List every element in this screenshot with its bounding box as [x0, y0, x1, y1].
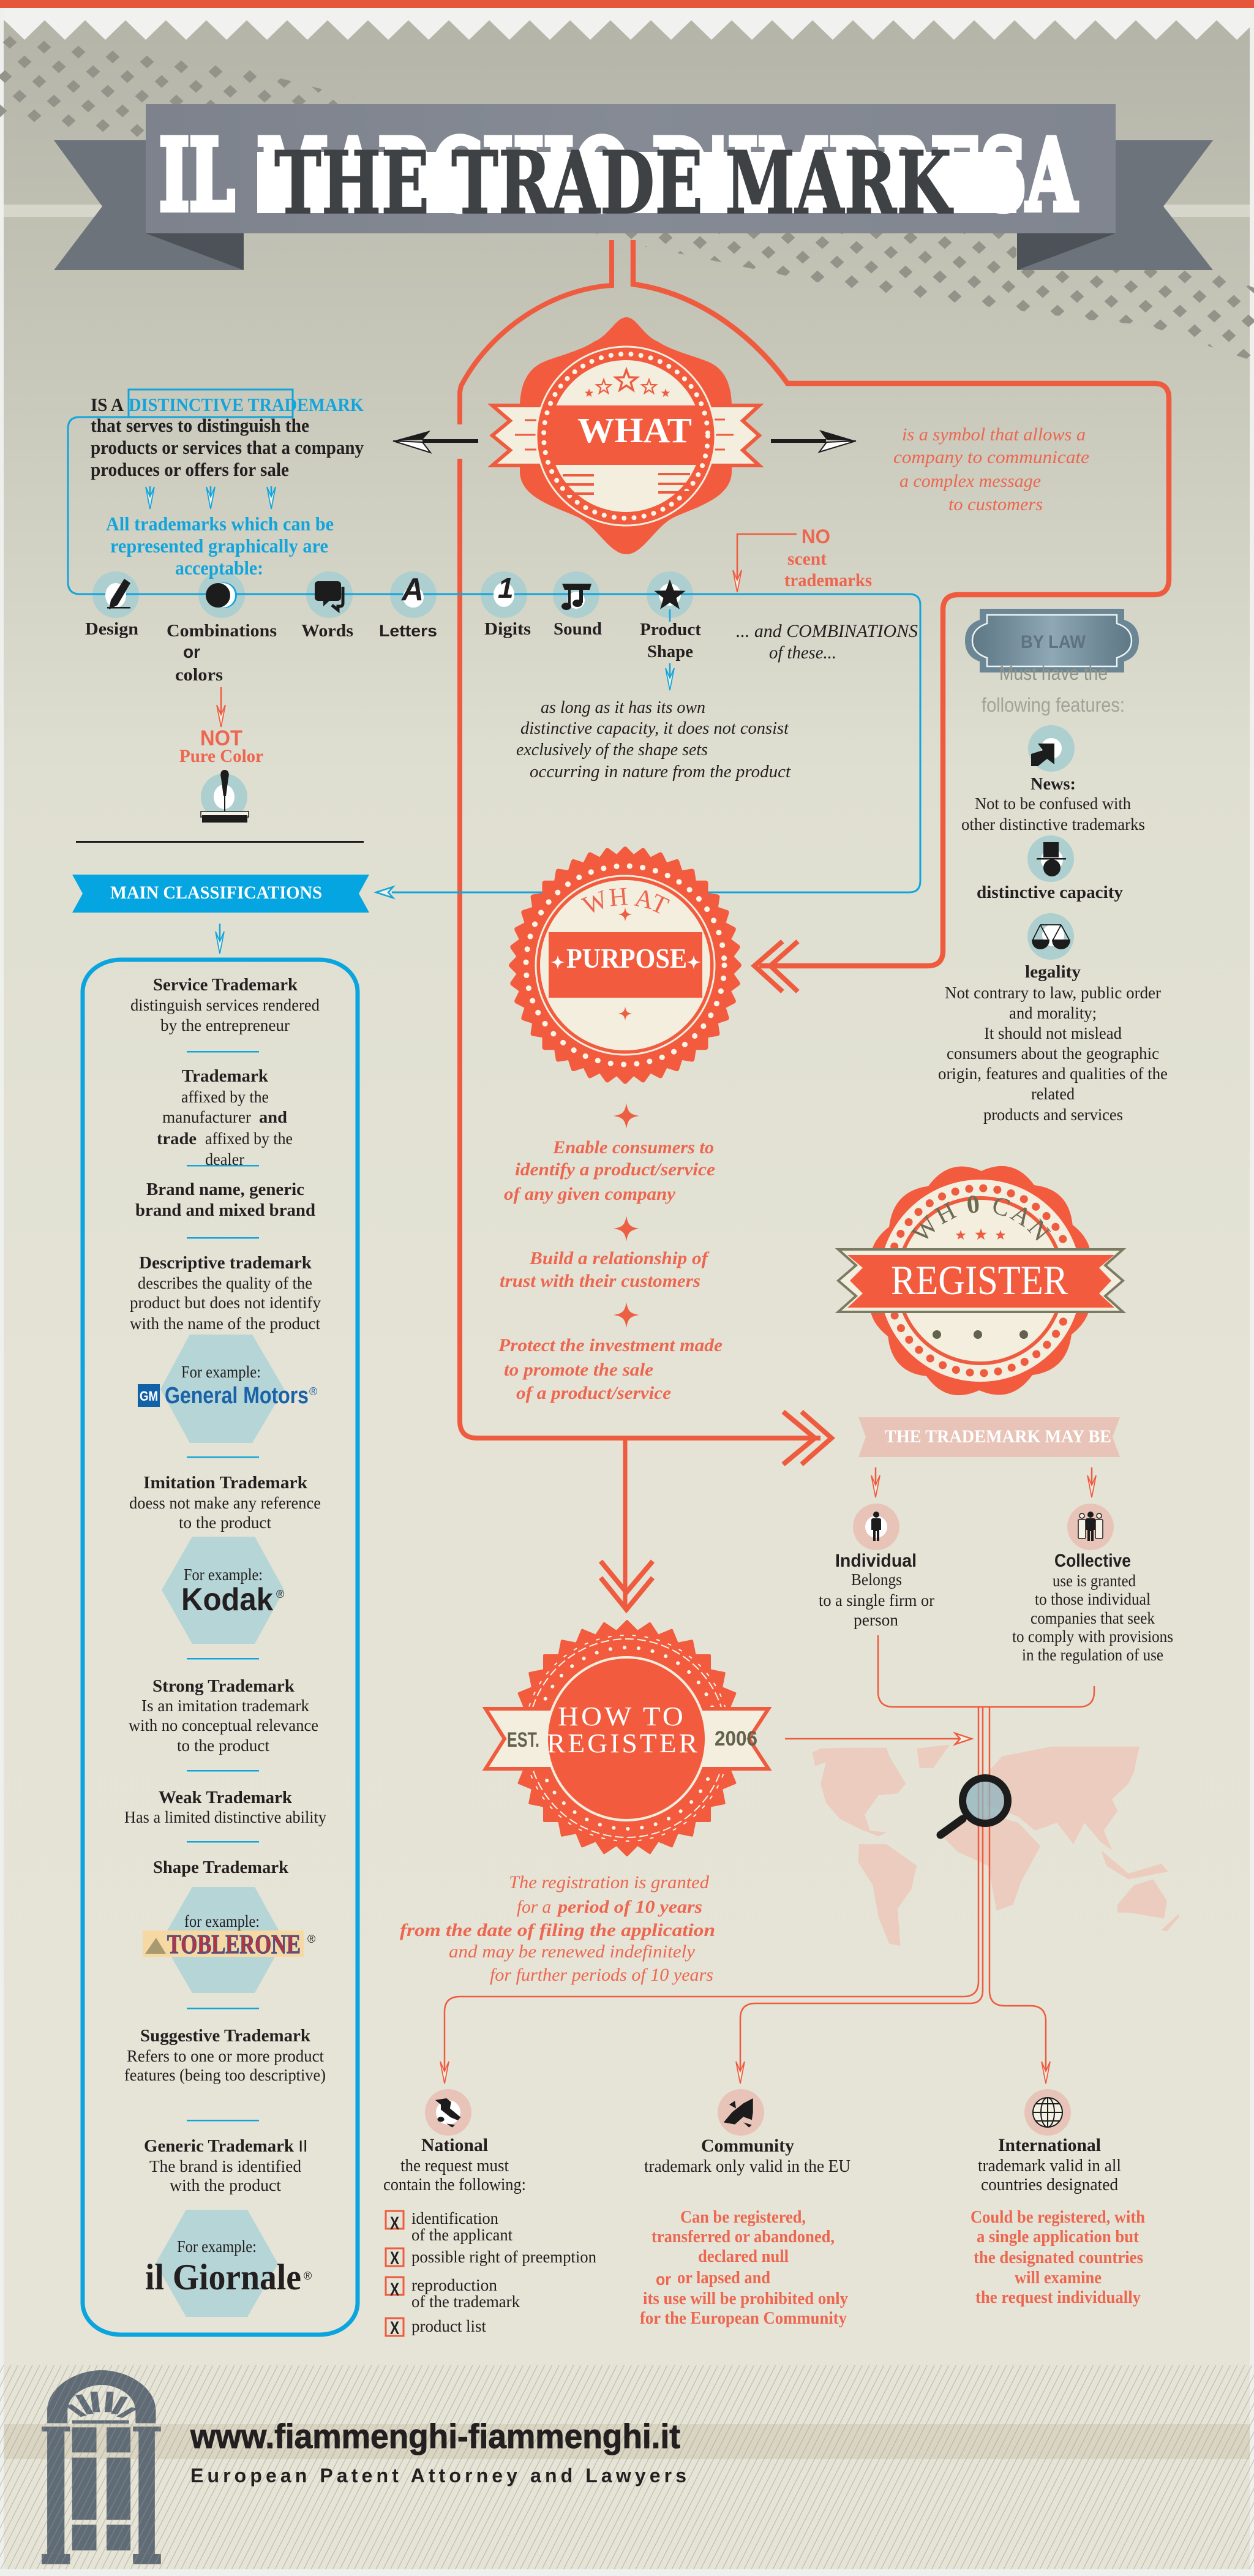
title: THE TRADE MARK: [274, 133, 953, 234]
not pure color: NOT: [200, 726, 242, 750]
community red text: Can be registered,: [680, 2208, 806, 2227]
arrow: chevrons to purpose: [754, 941, 798, 992]
registration text: period of 10 years: [556, 1897, 702, 1917]
graphically representable text: [106, 513, 334, 579]
trademark: and: [259, 1108, 287, 1126]
registration text: from the date of filing the application: [400, 1920, 715, 1940]
arrow: no scent: [733, 534, 797, 592]
purpose bullets: of a product/service: [516, 1383, 671, 1403]
icon: stamp: [201, 770, 249, 823]
symbol description: to customers: [948, 494, 1043, 514]
plaque: by law: BY LAW: [1021, 632, 1086, 652]
arrow: not pure color: [217, 687, 225, 727]
badge: how to register: EST.: [507, 1728, 539, 1752]
imitation trademark: Imitation Trademark: [143, 1473, 308, 1493]
arrow: chevrons to register: [783, 1412, 832, 1464]
descriptive trademark: [130, 1253, 321, 1381]
icon: collective: [1067, 1504, 1114, 1550]
individual text: to a single firm or: [819, 1591, 934, 1610]
badge: who can register: REGISTER: [891, 1257, 1068, 1303]
icon: magnifier: [940, 1778, 1008, 1835]
footer band: [4, 2424, 1250, 2459]
badge: what: WHAT: [577, 410, 692, 450]
icon: distinctive capacity: [1027, 835, 1074, 882]
purpose bullets: Enable consumers to: [552, 1137, 714, 1158]
suggestive trademark: features (being too descriptive): [124, 2066, 326, 2084]
registration text: The registration is granted: [509, 1872, 710, 1892]
descriptive trademark: product but does not identify: [130, 1294, 321, 1312]
top red band: [0, 0, 1254, 8]
background light stripe: [4, 205, 1250, 217]
community red text: its use will be prohibited only: [643, 2289, 848, 2308]
logo: general motors: ®: [309, 1385, 317, 1398]
badge: how to register: HOW TO: [558, 1701, 686, 1731]
community text: Community: [701, 2136, 794, 2156]
trademark: dealer: [205, 1150, 244, 1169]
purpose bullets: trust with their customers: [500, 1271, 700, 1291]
symbol description: company to communicate: [893, 447, 1089, 467]
purpose bullets: identify a product/service: [515, 1159, 715, 1180]
shape trademark: for example:: [184, 1912, 260, 1930]
purpose bullets: Protect the investment made: [498, 1335, 723, 1355]
news text: other distinctive trademarks: [961, 815, 1145, 834]
registration text: for a: [517, 1897, 551, 1917]
graphically representable text: acceptable:: [175, 557, 263, 579]
bracket: individual and collective join: [878, 1635, 1094, 1707]
badge: how to register: [486, 1621, 768, 1855]
national text: National: [421, 2135, 488, 2155]
trademark: manufacturer: [162, 1108, 251, 1126]
international red text: Could be registered, with: [971, 2208, 1145, 2227]
shape description: occurring in nature from the product: [530, 762, 791, 781]
checklist: X: [390, 2280, 399, 2300]
badge: who can register: WH 0 CAN: [910, 1196, 1051, 1241]
checklist: of the applicant: [411, 2226, 512, 2244]
registration text: for further periods of 10 years: [490, 1965, 713, 1985]
purpose bullets: [498, 1103, 723, 1403]
arrow: right black: [771, 430, 856, 452]
arrow: how to register to map: [785, 1733, 972, 1744]
icon: letters: A: [400, 572, 424, 608]
hexagon backgrounds: [156, 1335, 284, 2317]
plaque: by law: [965, 609, 1139, 672]
individual text: [819, 1551, 934, 1629]
icon labels: Sound: [554, 619, 602, 639]
generic trademark: For example:: [177, 2237, 257, 2256]
individual text: person: [854, 1611, 899, 1629]
legality text: It should not mislead: [984, 1024, 1122, 1042]
icon labels: or: [183, 642, 200, 662]
no scent trademarks: [784, 525, 872, 590]
trademark: Trademark: [182, 1066, 269, 1086]
weak trademark: Has a limited distinctive ability: [124, 1808, 326, 1826]
icon: digits: [494, 572, 514, 607]
purpose bullets: Build a relationship of: [529, 1248, 710, 1268]
shape description: distinctive capacity, it does not consist: [520, 718, 789, 738]
connector to national: [445, 1707, 978, 2070]
banner: the trademark may be: THE TRADEMARK MAY BE: [885, 1426, 1111, 1447]
orange flow line right: [633, 240, 1169, 966]
legality text: related: [1031, 1085, 1075, 1103]
trademark: [157, 1066, 293, 1169]
checklist: X: [390, 2318, 399, 2338]
trademark: affixed by the: [181, 1088, 269, 1106]
banner: the trademark may be: [858, 1417, 1120, 1457]
connector to international: [989, 1707, 1046, 2070]
collective text: to those individual: [1035, 1590, 1151, 1608]
generic trademark: with the product: [170, 2176, 282, 2194]
background diamonds top left: [0, 34, 380, 141]
shape trademark: [153, 1858, 289, 1930]
suggestive trademark: Refers to one or more product: [127, 2047, 324, 2065]
shape description: exclusively of the shape sets: [516, 740, 708, 759]
descriptive trademark: Descriptive trademark: [139, 1253, 312, 1273]
logo: toblerone: TOBLERONE: [167, 1929, 301, 1959]
strong trademark: Is an imitation trademark: [141, 1697, 309, 1715]
no scent trademarks: NO: [802, 525, 830, 548]
icon labels: Shape: [647, 642, 693, 661]
footer tagline: European Patent Attorney and Lawyers: [190, 2465, 686, 2487]
news text: Not to be confused with: [975, 794, 1131, 813]
badge: purpose: [509, 846, 742, 1084]
world map: [813, 1745, 1179, 1946]
icon: sound: [561, 584, 591, 610]
logo: general motors: General Motors: [165, 1383, 309, 1409]
icon: product shape: [654, 579, 686, 622]
definition text: [91, 394, 364, 480]
national text: the request must: [400, 2156, 509, 2175]
symbol description: a complex message: [899, 471, 1041, 491]
icon labels: [85, 619, 701, 685]
community text: trademark only valid in the EU: [644, 2157, 850, 2176]
divider: [76, 841, 364, 843]
legality text: and morality;: [1009, 1004, 1097, 1022]
international text: International: [998, 2135, 1101, 2155]
banner: main classifications: MAIN CLASSIFICATIONS: [110, 883, 322, 903]
definition text: IS A: [91, 394, 124, 415]
top white zigzag: [4, 8, 1250, 40]
brand name: brand and mixed brand: [135, 1200, 315, 1220]
combinations caption: of these...: [769, 642, 836, 663]
international red text: [971, 2208, 1145, 2307]
international red text: will examine: [1015, 2269, 1102, 2288]
definition text: products or services that a company: [91, 437, 364, 458]
orange flow line left: [460, 240, 820, 1438]
arrow heads to register types: [440, 2062, 1050, 2084]
connector to community: [740, 1707, 983, 2070]
no scent trademarks: trademarks: [784, 570, 872, 590]
checklist: reproduction: [411, 2276, 498, 2294]
collective text: use is granted: [1053, 1572, 1136, 1590]
service trademark: by the entrepreneur: [160, 1016, 290, 1034]
legality text: consumers about the geographic: [947, 1044, 1159, 1063]
graphically representable text: represented graphically are: [110, 535, 328, 557]
blue flow line: [68, 390, 920, 892]
features caption: [982, 662, 1125, 716]
community red text: for the European Community: [640, 2309, 847, 2328]
not pure color: [179, 726, 263, 766]
icon labels: Words: [301, 621, 353, 641]
imitation trademark: For example:: [184, 1565, 263, 1584]
arrow: into classifications banner: [376, 887, 393, 898]
checklist: possible right of preemption: [411, 2248, 596, 2266]
purpose bullets: to promote the sale: [504, 1360, 653, 1380]
legality text: Not contrary to law, public order: [945, 984, 1161, 1002]
features caption: following features:: [982, 694, 1125, 716]
news text: News:: [1031, 774, 1076, 794]
features caption: Must have the: [999, 662, 1108, 684]
checklist: product list: [411, 2317, 486, 2335]
logo: kodak: ®: [276, 1588, 284, 1600]
international text: countries designated: [981, 2175, 1118, 2194]
not pure color: Pure Color: [179, 746, 263, 766]
footer url: www.fiammenghi-fiammenghi.it: [190, 2417, 680, 2455]
logo: general motors: GM: [140, 1388, 158, 1404]
icon: combinations: [206, 582, 237, 608]
checklist: X: [390, 2213, 399, 2234]
national text: [383, 2135, 526, 2194]
icon labels: Digits: [484, 619, 531, 639]
legality text: products and services: [983, 1105, 1123, 1124]
weak trademark: Weak Trademark: [159, 1788, 293, 1807]
checklist: of the trademark: [411, 2292, 520, 2311]
icon labels: colors: [175, 665, 223, 685]
checklist: identification: [411, 2209, 498, 2228]
logo: il giornale: ®: [304, 2270, 312, 2282]
service trademark: [130, 975, 320, 1034]
international text: trademark valid in all: [978, 2156, 1121, 2175]
distinctive capacity label: distinctive capacity: [977, 883, 1124, 902]
combinations caption: [736, 621, 918, 663]
shape trademark: Shape Trademark: [153, 1858, 289, 1877]
background diamonds right: [582, 233, 1254, 361]
icon labels: Design: [85, 619, 138, 639]
dividers: [187, 1051, 259, 2122]
logo: il giornale: il Giornale: [145, 2257, 301, 2297]
national text: contain the following:: [383, 2175, 526, 2194]
arrow: chevrons to how to register: [601, 1561, 653, 1610]
checklist: [386, 2209, 596, 2338]
collective text: Collective: [1054, 1551, 1131, 1571]
strong trademark: to the product: [177, 1736, 269, 1755]
collective text: to comply with provisions: [1012, 1627, 1173, 1646]
footer hatch: [0, 2365, 1254, 2569]
icon discs row: [92, 571, 693, 618]
imitation trademark: doess not make any reference: [129, 1494, 321, 1512]
icon labels: Product: [640, 620, 701, 639]
definition text: produces or offers for sale: [91, 459, 289, 480]
banner: main classifications: [72, 875, 369, 913]
generic trademark: Il: [298, 2137, 307, 2155]
logo: kodak: Kodak: [181, 1582, 273, 1618]
community text: [644, 2136, 850, 2176]
icon: individual: [853, 1504, 899, 1550]
generic trademark: [144, 2136, 307, 2256]
arrow: shape down: [666, 663, 674, 690]
generic trademark: The brand is identified: [149, 2157, 301, 2175]
graphically representable text: All trademarks which can be: [106, 513, 334, 535]
community red text: declared null: [698, 2247, 789, 2266]
title ribbon: [54, 104, 1213, 270]
definition text: that serves to distinguish the: [91, 415, 309, 436]
icon: news: [1028, 725, 1075, 772]
community red text: or: [656, 2270, 671, 2289]
symbol description: [893, 424, 1089, 514]
icon: community: [718, 2089, 764, 2136]
brand name: Brand name, generic: [146, 1180, 304, 1199]
international red text: a single application but: [977, 2228, 1139, 2246]
icon: legality: [1027, 913, 1074, 960]
imitation trademark: to the product: [179, 1513, 271, 1532]
strong trademark: [129, 1676, 318, 1755]
checklist: X: [390, 2248, 399, 2269]
purpose bullets: of any given company: [504, 1184, 676, 1204]
legality text: origin, features and qualities of the: [938, 1064, 1168, 1083]
suggestive trademark: Suggestive Trademark: [140, 2026, 311, 2046]
news text: [961, 774, 1145, 834]
icon: door logo: [42, 2370, 161, 2564]
combinations caption: ... and COMBINATIONS: [736, 621, 918, 641]
service trademark: Service Trademark: [153, 975, 298, 995]
international red text: the request individually: [975, 2288, 1141, 2307]
strong trademark: Strong Trademark: [152, 1676, 295, 1696]
icon: words: [315, 581, 343, 610]
badge: how to register: REGISTER: [547, 1728, 700, 1758]
imitation trademark: [129, 1473, 321, 1584]
arrows: to individual and collective: [871, 1467, 1096, 1497]
collective text: in the regulation of use: [1022, 1646, 1163, 1664]
service trademark: distinguish services rendered: [130, 996, 320, 1014]
community red text: or lapsed and: [677, 2269, 770, 2288]
icon: digits: 1: [498, 572, 514, 604]
symbol description: is a symbol that allows a: [902, 424, 1086, 445]
international red text: the designated countries: [974, 2248, 1143, 2267]
descriptive trademark: with the name of the product: [130, 1314, 320, 1333]
icon: design: [105, 579, 130, 609]
badge: purpose: WH AT: [580, 888, 670, 914]
badge: who can register: [835, 1166, 1127, 1395]
shape description: as long as it has its own: [541, 698, 705, 717]
collective text: companies that seek: [1031, 1609, 1155, 1627]
descriptive trademark: describes the quality of the: [138, 1274, 312, 1292]
logo: toblerone: ®: [307, 1933, 315, 1945]
community red text: [640, 2208, 848, 2328]
brand name: [135, 1180, 315, 1220]
descriptive trademark: For example:: [181, 1363, 261, 1381]
international text: [978, 2135, 1121, 2194]
legality text: [938, 962, 1168, 1124]
bottom strip: [0, 2569, 1254, 2576]
badge: how to register: 2006: [715, 1727, 757, 1750]
orange flow line down to how to register: [623, 1438, 627, 1606]
individual text: Belongs: [851, 1570, 902, 1589]
generic trademark: Generic Trademark: [144, 2136, 295, 2156]
panel: classifications: [83, 960, 358, 2335]
badge: what: [492, 317, 759, 554]
arrow: left black: [393, 431, 478, 453]
suggestive trademark: [124, 2026, 326, 2084]
arrow: down to classifications: [216, 924, 224, 954]
icon labels: Letters: [379, 622, 437, 640]
community red text: transferred or abandoned,: [651, 2228, 835, 2246]
shape description: [516, 698, 791, 781]
registration text: [400, 1872, 715, 1985]
icon: national: [425, 2089, 471, 2136]
definition text: DISTINCTIVE TRADEMARK: [129, 394, 364, 415]
weak trademark: [124, 1788, 326, 1826]
registration text: and may be renewed indefinitely: [449, 1941, 696, 1962]
arrows: blue three: [146, 486, 276, 509]
badge: purpose: PURPOSE: [566, 943, 687, 974]
trademark: trade: [157, 1129, 197, 1148]
collective text: [1012, 1551, 1173, 1664]
icon: international: [1024, 2089, 1071, 2136]
no scent trademarks: scent: [787, 549, 827, 569]
strong trademark: with no conceptual relevance: [129, 1716, 318, 1734]
individual text: Individual: [835, 1551, 917, 1571]
legality text: legality: [1025, 962, 1081, 982]
icon labels: Combinations: [167, 621, 277, 641]
trademark: affixed by the: [205, 1129, 293, 1148]
